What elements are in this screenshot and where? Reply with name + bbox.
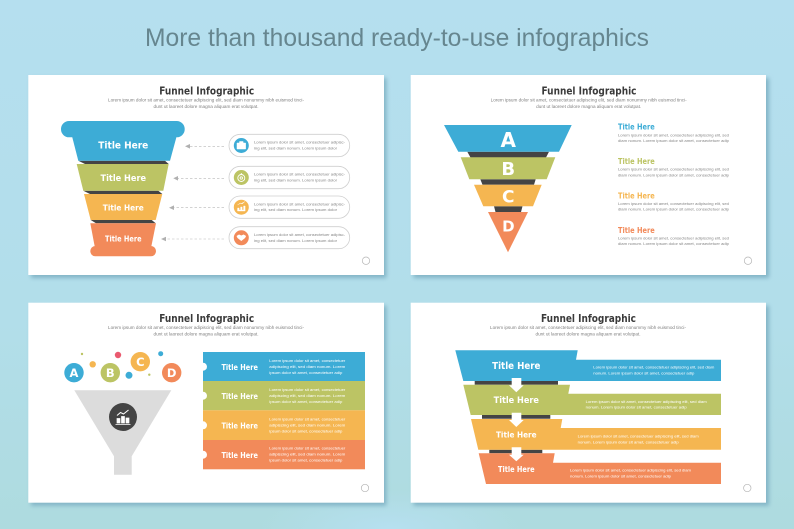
callout: handshake: ing elit, sed diam nonum. Lorem ipsum dolor [254, 238, 338, 243]
bubbles: B [106, 366, 115, 380]
stacked colour bars: Title Here [221, 392, 258, 401]
stepped funnel chart: Lorem ipsum dolor sit amet, consectetuer adipiscing elit, sed diam [586, 399, 707, 404]
text block: A: Lorem ipsum dolor sit amet, consectetuer adipiscing elit, sed [618, 132, 729, 137]
callout: target [229, 166, 350, 189]
stacked colour bars: adipiscing elit, sed diam nonum. Lorem [269, 364, 346, 369]
heading: slide 3: Funnel Infographic [159, 313, 254, 325]
callout: handshake: Lorem ipsum dolor sit amet, consectetuer adipisc- [254, 232, 346, 237]
text block: C: Title Here [618, 191, 655, 200]
stacked colour bars [199, 352, 365, 469]
text block: D: Lorem ipsum dolor sit amet, consectetuer adipiscing elit, sed [618, 235, 729, 240]
pyramid funnel chart: D [502, 218, 515, 236]
stepped funnel chart: nonum. Lorem ipsum dolor sit amet, consectetuer adip [570, 474, 672, 479]
stacked colour bars: ipsum dolor sit amet, consectetuer adip [269, 399, 343, 404]
heading: slide 2: Funnel Infographic [542, 86, 636, 98]
description: slide 1: Lorem ipsum dolor sit amet, consectetuer adipiscing elit, sed diam nonummy nibh euismod tinci- [108, 98, 305, 102]
stacked colour bars: adipiscing elit, sed diam nonum. Lorem [269, 393, 346, 398]
pyramid funnel chart [444, 125, 572, 252]
text block: A: Title Here [618, 123, 655, 132]
bubbles: A [70, 366, 79, 380]
stepped funnel chart: Lorem ipsum dolor sit amet, consectetuer adipiscing elit, sed diam [593, 364, 715, 369]
text block: A [618, 123, 730, 143]
stepped funnel chart: Lorem ipsum dolor sit amet, consectetuer adipiscing elit, sed diam [570, 468, 692, 473]
pyramid funnel chart: C [502, 188, 515, 208]
callout: briefcase: ing elit, sed diam nonum. Lorem ipsum dolor [254, 145, 338, 150]
funnel chart: Title Here [98, 141, 149, 152]
stacked colour bars: ipsum dolor sit amet, consectetuer adip [269, 458, 343, 463]
bubbles [64, 351, 181, 382]
stacked colour bars: adipiscing elit, sed diam nonum. Lorem [269, 452, 346, 457]
icon: stopwatch [238, 173, 245, 182]
stepped funnel chart: Title Here [492, 361, 540, 372]
text block: D: Title Here [618, 226, 655, 235]
text block: C: diam nonum. Lorem ipsum dolor sit amet, consectetuer adip [618, 207, 730, 212]
arrows: dashed pointers [161, 144, 224, 241]
funnel chart: Title Here [101, 174, 146, 184]
stepped funnel chart: nonum. Lorem ipsum dolor sit amet, consectetuer adip [593, 370, 695, 375]
page number badge [362, 257, 370, 264]
text block: C: Lorem ipsum dolor sit amet, consectetuer adipiscing elit, sed [618, 201, 729, 206]
description: slide 4: dunt ut laoreet dolore magna aliquam erat volutpat. [536, 331, 640, 336]
bubbles: C [136, 355, 145, 369]
text block: D: diam nonum. Lorem ipsum dolor sit amet, consectetuer adip [618, 241, 730, 246]
callout: growth [229, 196, 350, 218]
icon: chart badge [109, 403, 137, 431]
text block: A: diam nonum. Lorem ipsum dolor sit amet, consectetuer adip [618, 138, 730, 143]
stacked colour bars: Lorem ipsum dolor sit amet, consectetuer [269, 416, 346, 421]
stepped funnel chart [455, 350, 721, 484]
callout: growth: Lorem ipsum dolor sit amet, consectetuer adipisc- [254, 201, 346, 206]
pyramid funnel chart: A [501, 128, 517, 152]
stepped funnel chart: nonum. Lorem ipsum dolor sit amet, consectetuer adip [578, 439, 680, 444]
stacked colour bars: Title Here [221, 422, 258, 431]
stacked colour bars: Title Here [221, 363, 258, 372]
description: slide 2: Lorem ipsum dolor sit amet, consectetuer adipiscing elit, sed diam nonummy nibh euismod tinci- [491, 98, 687, 102]
description: slide 3 [108, 325, 305, 336]
panel: stepped funnel with banners [411, 303, 769, 506]
text block: C [618, 191, 730, 212]
stepped funnel chart: Title Here [498, 465, 535, 474]
stepped funnel chart: Lorem ipsum dolor sit amet, consectetuer adipiscing elit, sed diam [578, 433, 699, 438]
stepped funnel chart: nonum. Lorem ipsum dolor sit amet, consectetuer adip [586, 405, 688, 410]
stacked colour bars: ipsum dolor sit amet, consectetuer adip [269, 370, 343, 375]
description: slide 3: dunt ut laoreet dolore magna aliquam erat volutpat. [154, 331, 258, 336]
stepped funnel chart: Title Here [496, 430, 537, 440]
callout: handshake [229, 227, 350, 249]
panel: gray funnel with bubbles [28, 303, 387, 506]
callout: target: Lorem ipsum dolor sit amet, consectetuer adipisc- [254, 172, 346, 177]
arrows: white down arrows [509, 378, 524, 461]
description: slide 3: Lorem ipsum dolor sit amet, consectetuer adipiscing elit, sed diam nonummy nibh euismod tinci- [108, 325, 305, 330]
description: slide 4 [490, 325, 687, 336]
main heading: More than thousand ready-to-use infographics [145, 24, 649, 52]
icon: handshake [236, 234, 246, 241]
page number badge [744, 257, 752, 264]
callout: growth: ing elit, sed diam nonum. Lorem ipsum dolor [254, 207, 338, 212]
funnel chart [61, 121, 185, 256]
page number badge [744, 484, 751, 492]
callout: briefcase: Lorem ipsum dolor sit amet, consectetuer adipisc- [254, 140, 346, 145]
description: slide 1: dunt ut laoreet dolore magna aliquam erat volutpat. [154, 104, 258, 109]
page number badge [361, 484, 369, 492]
text block: B: Title Here [618, 157, 655, 166]
icon: briefcase [237, 142, 246, 149]
stacked colour bars: Lorem ipsum dolor sit amet, consectetuer [269, 387, 346, 392]
panel: lettered pyramid funnel [411, 75, 769, 278]
stepped funnel chart: Title Here [494, 396, 539, 406]
funnel chart: Title Here [105, 234, 142, 244]
icon: growth chart [238, 202, 245, 211]
gray funnel [74, 390, 171, 475]
description: slide 1 [108, 98, 305, 109]
stacked colour bars: Lorem ipsum dolor sit amet, consectetuer [269, 358, 346, 363]
panel: funnel with pill callouts [28, 75, 387, 278]
description: slide 4: Lorem ipsum dolor sit amet, consectetuer adipiscing elit, sed diam nonummy nibh euismod tinci- [490, 325, 687, 330]
pyramid funnel chart: B [501, 159, 515, 180]
callout: target: ing elit, sed diam nonum. Lorem ipsum dolor [254, 177, 338, 182]
text block: B: Lorem ipsum dolor sit amet, consectetuer adipiscing elit, sed [618, 167, 729, 172]
heading: slide 4: Funnel Infographic [541, 313, 636, 325]
description: slide 2 [491, 98, 687, 109]
stacked colour bars: ipsum dolor sit amet, consectetuer adip [269, 428, 343, 433]
heading: slide 1: Funnel Infographic [159, 86, 254, 98]
callout: briefcase [229, 134, 350, 157]
text block: B [618, 157, 730, 177]
text block: D [618, 226, 730, 246]
bubbles: D [167, 366, 176, 380]
funnel chart: Title Here [103, 203, 144, 213]
stacked colour bars: Lorem ipsum dolor sit amet, consectetuer [269, 446, 346, 451]
stacked colour bars: Title Here [221, 451, 258, 460]
text block: B: diam nonum. Lorem ipsum dolor sit amet, consectetuer adip [618, 172, 730, 177]
stacked colour bars: adipiscing elit, sed diam nonum. Lorem [269, 422, 346, 427]
description: slide 2: dunt ut laoreet dolore magna aliquam erat volutpat. [536, 104, 641, 109]
